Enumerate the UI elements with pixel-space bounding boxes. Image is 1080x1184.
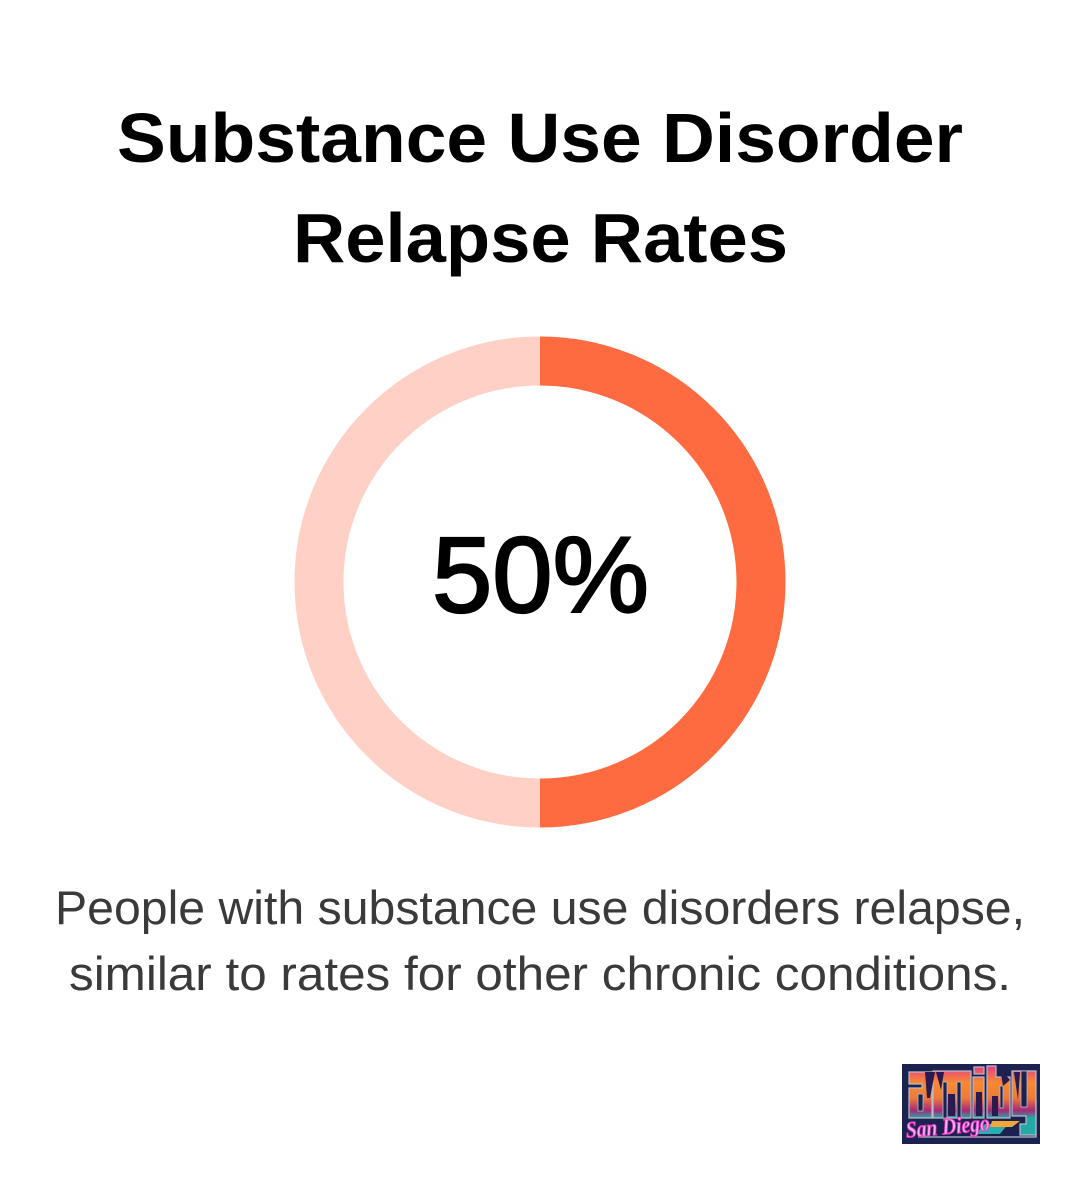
logo wave and frame <box>975 1124 1008 1134</box>
logo letterforms band <box>909 1066 1036 1135</box>
title: Relapse Rates <box>293 199 788 277</box>
logo: Amity San Diego <box>902 1064 1040 1144</box>
description text <box>55 881 1025 1000</box>
title <box>117 99 963 277</box>
donut chart: 50% <box>319 361 761 803</box>
description text: People with substance use disorders relapse, <box>55 881 1025 934</box>
logo script: San Diego: San Diego <box>905 1110 991 1143</box>
title: Substance Use Disorder <box>117 99 963 177</box>
center value: 50%: 50% <box>432 514 649 635</box>
logo palm silhouettes <box>925 1068 1020 1116</box>
logo inner strokes <box>918 1071 1027 1118</box>
description text: similar to rates for other chronic conditions. <box>69 947 1011 1000</box>
